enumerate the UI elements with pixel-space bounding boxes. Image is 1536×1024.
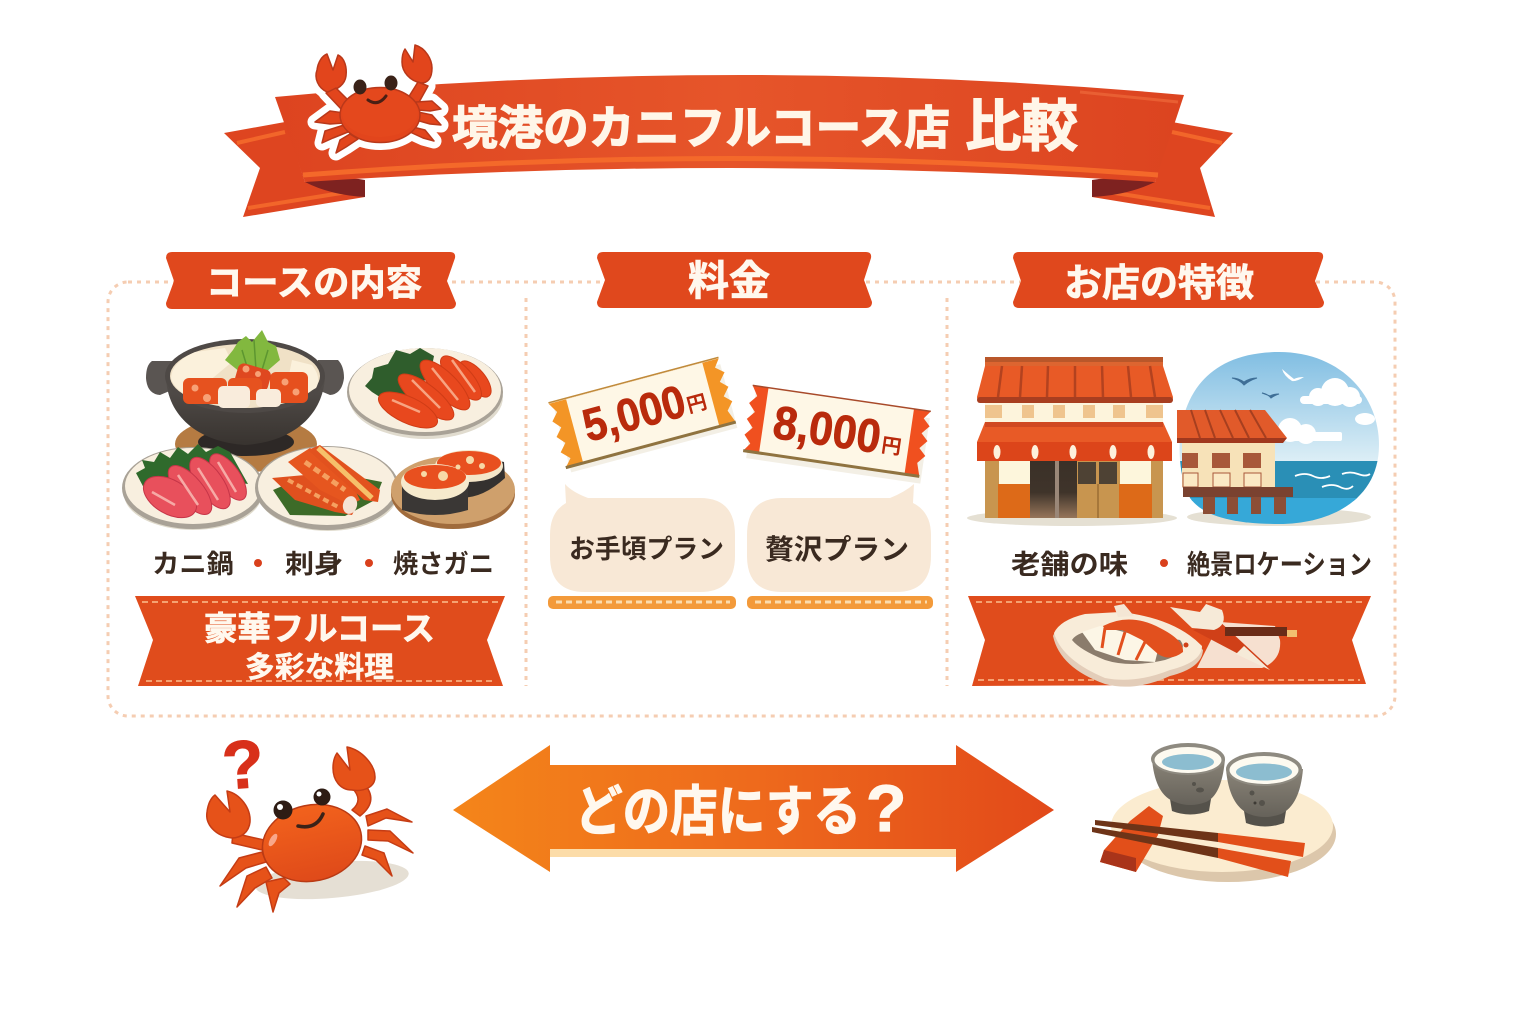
speech bubble: luxury plan [747, 484, 931, 592]
panel: price [547, 252, 933, 609]
icon: sashimi plate (bottom left) [122, 444, 264, 530]
heading: shop features: お店の特徴 [1064, 263, 1254, 305]
question mark: ? [220, 726, 266, 804]
price ticket: 8,000 yen [741, 385, 932, 484]
luxury plan stripe [747, 596, 933, 609]
speech bubble: affordable plan [550, 484, 735, 592]
heading: price [597, 252, 872, 308]
feature labels: 老舗の味 [1011, 550, 1128, 580]
price ticket: 5,000 yen: 5,000 [577, 375, 691, 452]
heading: course contents [166, 252, 456, 309]
title text: 境港のカニフルコース店 [452, 102, 950, 154]
callout ribbon: gorgeous full course: 豪華フルコース [204, 610, 435, 647]
price ticket: 5,000 yen [547, 357, 739, 474]
panel: course contents [122, 252, 515, 686]
chopsticks [1095, 820, 1218, 842]
heading: price: 料金 [688, 258, 770, 304]
icon: crab roe rolls on wood board [391, 450, 515, 529]
comparison panel frame [108, 282, 1395, 716]
feature labels [1011, 550, 1372, 580]
double arrow: which shop? [453, 745, 1054, 872]
price ticket: 5,000 yen: 円 [684, 391, 709, 418]
icon: seaside scenery [1170, 350, 1385, 528]
illustration: crab dishes [122, 330, 515, 531]
sake cup right [1226, 752, 1303, 826]
heading: course contents: コースの内容 [206, 262, 422, 303]
infographic: crab full-course restaurant comparison [106, 44, 1396, 913]
double arrow: which shop?: どの店にする [575, 782, 861, 842]
icon: confused crab with question mark [207, 726, 413, 912]
chopstick rest [1100, 806, 1163, 872]
icon: grilled crab plate (center) [255, 445, 399, 531]
icon: sashimi plate (top right) [347, 348, 503, 439]
affordable plan stripe [548, 596, 736, 609]
price ticket: 8,000 yen: 円 [880, 435, 903, 459]
price ticket: 8,000 yen: 8,000 [770, 395, 884, 463]
feature labels: 絶景ロケーション [1187, 550, 1372, 580]
callout ribbon: gorgeous full course [135, 596, 505, 686]
panel: shop features [967, 252, 1385, 687]
dish names: 刺身 [285, 549, 343, 579]
double arrow: which shop?: ? [866, 771, 906, 845]
callout ribbon: crab sushi plates [968, 596, 1371, 687]
icon: title crab [315, 45, 441, 153]
icon: sake cups and chopsticks [1092, 743, 1336, 882]
dish names: 焼さガニ [393, 549, 494, 579]
title text: 比較 [965, 95, 1078, 158]
speech bubble: luxury plan: 贅沢プラン [765, 534, 909, 565]
title banner [224, 75, 1233, 217]
icon: traditional shop [967, 357, 1177, 526]
heading: shop features [1013, 252, 1324, 308]
icon: crab hot pot [146, 330, 344, 472]
dish names [152, 549, 494, 579]
dish names: カニ鍋 [152, 549, 234, 579]
speech bubble: affordable plan: お手頃プラン [569, 534, 724, 564]
sake cup left [1151, 743, 1225, 814]
callout ribbon: gorgeous full course: 多彩な料理 [245, 651, 394, 684]
